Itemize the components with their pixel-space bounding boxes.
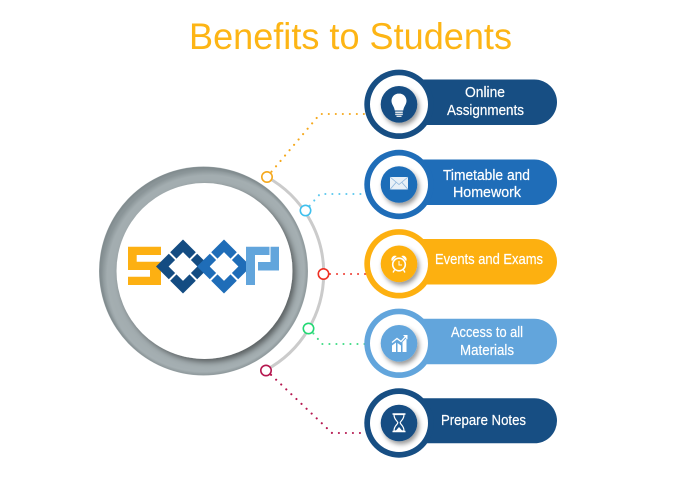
- label: [443, 168, 530, 201]
- icon: growth chart: [392, 335, 408, 352]
- label: [447, 85, 524, 119]
- panel: Access to all Materials: [364, 309, 557, 378]
- icon: hourglass: [392, 414, 406, 432]
- node: orange: [262, 172, 272, 182]
- connector: green dotted line: [309, 328, 366, 344]
- label: Events and Exams: [435, 252, 543, 268]
- label: Assignments: [447, 103, 524, 119]
- icon: envelope: [390, 177, 408, 190]
- label: Homework: [453, 185, 522, 201]
- logo letter P: [246, 247, 279, 285]
- connector: crimson dotted line: [266, 370, 366, 433]
- panel: Events and Exams: [364, 229, 557, 298]
- title: Benefits to Students: [189, 16, 512, 57]
- panel: Online Assignments: [364, 70, 557, 139]
- logo letter S: [128, 247, 161, 285]
- icon: light bulb: [392, 94, 406, 117]
- logo diamond two: [197, 240, 251, 294]
- label: Access to all: [451, 325, 523, 341]
- icon: alarm clock: [392, 256, 406, 272]
- arc around the logo circle: [266, 177, 324, 370]
- label: [451, 325, 523, 359]
- connector: red dotted line: [323, 273, 366, 275]
- panel: Timetable and Homework: [364, 150, 557, 219]
- label: Materials: [460, 343, 514, 359]
- node: crimson: [261, 365, 271, 376]
- label: Prepare Notes: [441, 413, 526, 429]
- label: Timetable and: [443, 168, 530, 184]
- node: blue: [300, 205, 311, 216]
- logo circle: [99, 166, 308, 376]
- connector: blue dotted line: [305, 194, 366, 211]
- label: Online: [465, 85, 505, 101]
- node: green: [303, 323, 314, 334]
- logo diamond one: [156, 240, 210, 294]
- logo: SOOP mark: [128, 240, 279, 294]
- panel: Prepare Notes: [364, 388, 557, 458]
- connector: orange dotted line: [267, 114, 366, 177]
- node: red: [318, 269, 329, 279]
